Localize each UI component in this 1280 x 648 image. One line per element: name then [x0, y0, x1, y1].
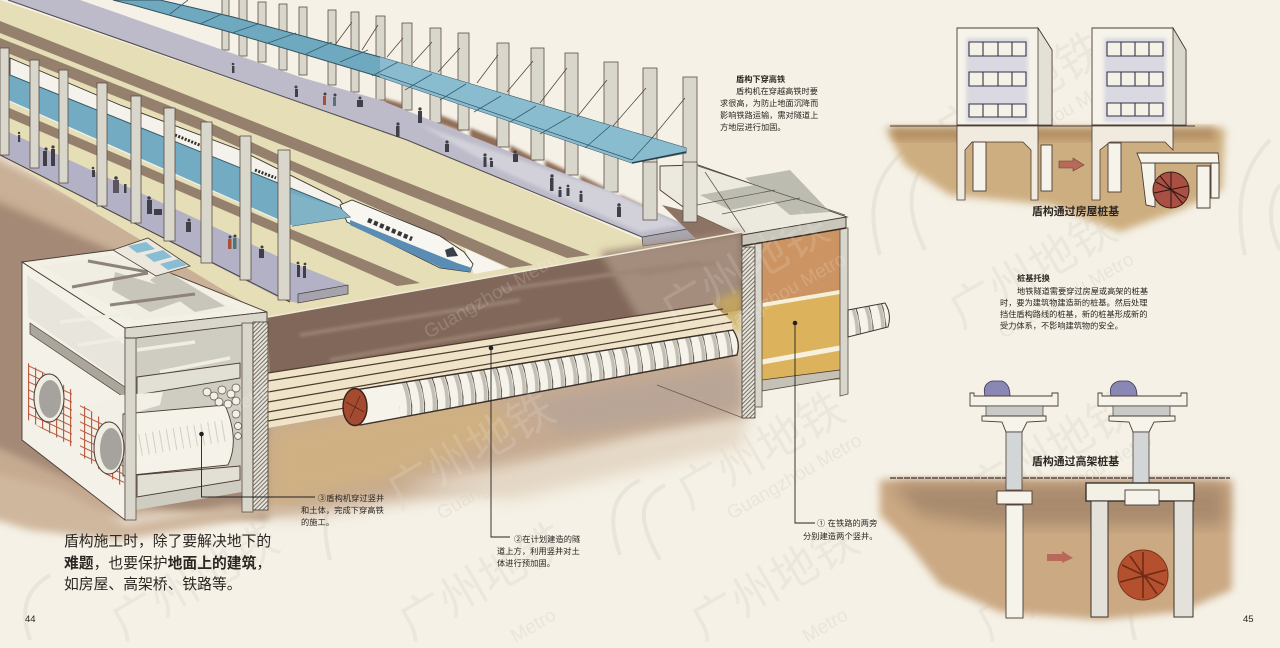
callout text 3: ③盾构机穿过竖井: [318, 493, 384, 503]
far pillars and supports: [222, 0, 697, 223]
near colonnade pillars: [0, 48, 290, 300]
diagram: passing viaduct piles: [880, 381, 1232, 620]
caption: building piles: 盾构通过房屋桩基: [1032, 204, 1119, 218]
callout text 3: 和土体，完成下穿高铁: [301, 505, 384, 515]
soil section: [762, 222, 840, 380]
watermark pattern: Guangzhou Metro: [434, 430, 576, 524]
intro text: 盾构施工时，除了要解决地下的: [64, 533, 271, 550]
trench lower diagonal edge: [657, 385, 743, 418]
callout line 1: [793, 321, 815, 523]
roof skylights: [113, 238, 190, 276]
light watermark over illustration: Guangzhou Metro: [133, 379, 275, 473]
watermark pattern: 广州地铁: [102, 513, 287, 648]
body: 受力体系，不影响建筑物的安全。: [1000, 320, 1123, 330]
near canopy: [0, 71, 350, 226]
far platform: [8, 0, 697, 246]
back interior: [136, 323, 242, 510]
light watermark over illustration: Guangzhou Metro: [708, 249, 850, 343]
watermark pattern: Guangzhou Metro: [1014, 430, 1156, 524]
text block: shield tunnelling under high-speed rail: [720, 74, 818, 132]
side panel: [22, 262, 125, 520]
light watermark over illustration: [133, 201, 850, 519]
viaduct pier 1: [970, 381, 1058, 618]
snow beside train: [465, 248, 507, 274]
body: 盾构机在穿越高铁时要: [736, 86, 818, 96]
watermark pattern: 广州地铁: [390, 513, 575, 648]
watermark pattern: 广州地铁: [668, 382, 853, 519]
back shaft roof: right: [643, 162, 847, 240]
shield cutter: [1153, 172, 1189, 208]
light watermark over illustration: 广州地铁: [378, 382, 563, 519]
grouting grid 2: [80, 403, 124, 488]
tunnel exit: [848, 303, 889, 337]
watermark pattern: 广州地铁: [940, 201, 1125, 338]
intro text: 难题: [64, 555, 94, 572]
watermark pattern: Guangzhou Metro: [983, 71, 1125, 165]
station surface cream strips: [0, 0, 745, 317]
ribbed shield tunnel: [343, 330, 738, 426]
rubble: [203, 384, 242, 439]
callout line 3: [199, 432, 315, 497]
watermark pattern: 广州地铁: [967, 513, 1152, 648]
body: 地铁隧道需要穿过房屋或高架的桩基: [1017, 286, 1148, 296]
page number 45: 45: [1243, 614, 1254, 625]
callout text 2: 体进行预加固。: [497, 558, 555, 568]
shield machine cutter head: [343, 388, 367, 426]
callout text 2: ②在计划建造的隧: [514, 534, 580, 544]
pipe roof reinforcement rods: [268, 304, 734, 428]
rail bed strips: [0, 21, 590, 286]
roof: [22, 250, 267, 328]
light watermark over illustration: 广州地铁: [652, 201, 837, 338]
watermark pattern: Guangzhou Metro: [996, 249, 1138, 343]
heading: 桩基托换: [1017, 273, 1051, 283]
caption: viaduct piles: 盾构通过高架桩基: [1032, 454, 1119, 468]
light watermark over illustration: Guangzhou Metro: [421, 249, 563, 343]
building 2: [1092, 28, 1219, 208]
top beam: [125, 312, 267, 338]
viaduct pier 2: [1086, 381, 1194, 617]
watermark pattern: Metro: [799, 605, 852, 647]
body: 挡住盾构路线的桩基，新的桩基形成新的: [1000, 309, 1147, 319]
callout text 3: 的施工。: [301, 517, 334, 527]
shield cutter: [1118, 550, 1168, 600]
body: 求很高，为防止地面沉降而: [720, 98, 818, 108]
body: 影响铁路运输，需对隧道上: [720, 110, 818, 120]
page number 44: 44: [25, 614, 36, 625]
text block: underpinning: [1000, 273, 1148, 330]
intro text: 如房屋、高架桥、铁路等。: [64, 575, 242, 593]
front post: [125, 328, 136, 520]
soil: [885, 128, 1225, 232]
body: 时，要为建筑物建造新的桩基。然后处理: [1000, 298, 1147, 308]
intro text: ，也要保护地面上的建筑，: [94, 556, 271, 572]
soil: [880, 480, 1232, 620]
arrow: [1047, 551, 1073, 563]
trench front wall: [268, 232, 742, 385]
watermark pattern: 广州地铁: [378, 382, 563, 519]
high-speed train: [340, 200, 473, 272]
soil ground wash: [0, 150, 745, 540]
train behind canopy: [10, 58, 350, 215]
arrow: [1059, 158, 1084, 171]
far canopy: [113, 0, 686, 163]
callout text 2: 道上方，利用竖井对土: [497, 546, 580, 556]
callout line 2: [489, 346, 510, 537]
tunnel in shaft: [50, 392, 233, 476]
passengers: [18, 63, 621, 278]
heading: 盾构下穿高铁: [736, 74, 786, 84]
right shaft: [742, 217, 889, 418]
body: 方地层进行加固。: [720, 122, 786, 132]
watermark pattern: Guangzhou Metro: [724, 430, 866, 524]
watermark pattern: 广州地铁: [682, 513, 867, 648]
struts: [30, 323, 125, 398]
watermark pattern: 广州地铁: [927, 23, 1112, 160]
hatched wall post: [242, 323, 253, 512]
callout text 1: ① 在铁路的两旁: [817, 518, 877, 528]
building 1: [957, 28, 1052, 200]
new foundation: [1137, 153, 1219, 208]
callout text 1: 分别建造两个竖井。: [803, 531, 878, 541]
watermark pattern: Metro: [507, 605, 560, 647]
watermark pattern: 广州地铁: [958, 382, 1143, 519]
grouting grid 1: [28, 363, 72, 447]
diagram: passing building piles: [885, 28, 1225, 232]
left shaft: [22, 238, 268, 520]
near platform: [0, 128, 348, 303]
